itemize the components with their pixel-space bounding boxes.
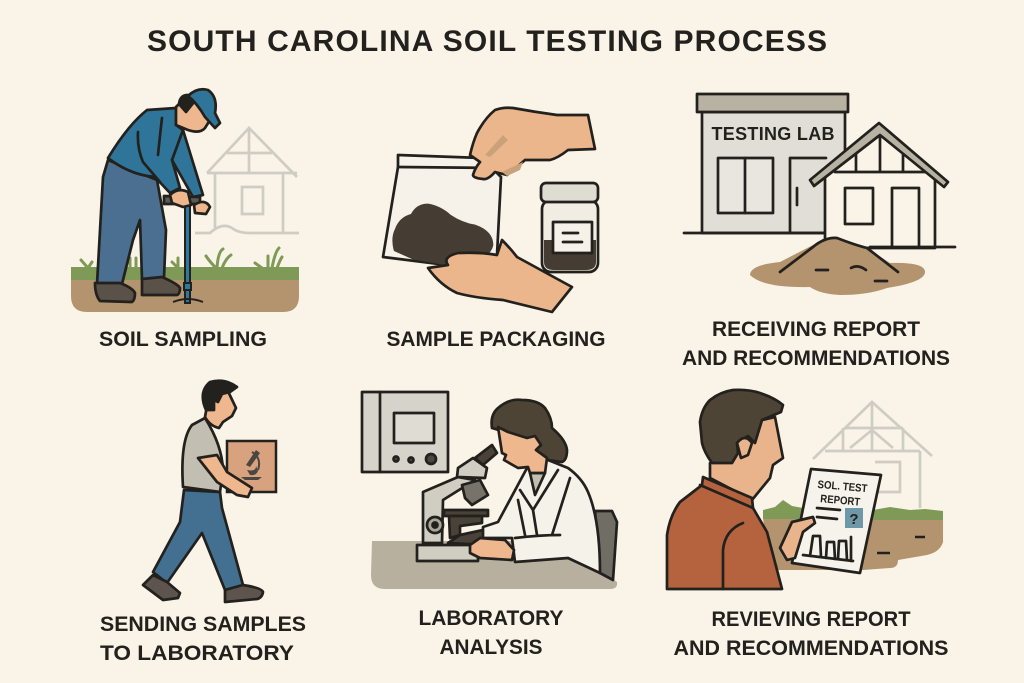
icon: man: [667, 390, 783, 589]
soil ground: [71, 280, 299, 312]
green bushes: [763, 500, 943, 520]
bench: [371, 541, 617, 589]
icon: soil mound: [750, 238, 925, 295]
panel: sending samples: [100, 381, 306, 665]
icon: hand: [780, 517, 815, 560]
icon: walking person: [143, 381, 263, 602]
label: sending samples: SENDING SAMPLES: [100, 613, 306, 636]
label: laboratory analysis: [418, 607, 564, 659]
label: sample packaging: SAMPLE PACKAGING: [386, 328, 606, 351]
icon: lower hand: [428, 240, 572, 312]
icon: chair: [595, 511, 617, 580]
panel: reviewing report: [667, 390, 948, 660]
icon: microscope: [417, 445, 497, 561]
panel: soil sampling: [71, 89, 299, 351]
label: question mark: ?: [849, 511, 859, 528]
label: sending samples: TO LABORATORY: [100, 642, 294, 665]
icon: soil jar: [541, 183, 598, 272]
icon: upper hand: [470, 108, 595, 179]
label: report heading: SOL. TEST: [817, 479, 868, 495]
icon: faded house: [813, 402, 932, 508]
panel: receiving report: [682, 94, 955, 370]
label: receiving report: [682, 318, 950, 370]
label: revieving report: AND RECOMMENDATIONS: [674, 637, 948, 660]
icon: testing lab building: [684, 94, 848, 233]
icon: house: [810, 123, 955, 248]
icon: report sheet: [792, 469, 881, 573]
label: report heading: [816, 479, 868, 509]
label: revieving report: [674, 608, 948, 660]
label: receiving report: RECEIVING REPORT: [712, 318, 920, 341]
icon: plastic bag with soil: [383, 155, 501, 265]
icon: soil probe: [173, 206, 203, 303]
label: report heading: REPORT: [820, 493, 861, 509]
icon: farmer: [95, 89, 220, 302]
icon: scientist: [470, 400, 600, 573]
grass tufts: [81, 248, 282, 268]
label: laboratory analysis: ANALYSIS: [440, 636, 542, 659]
title: SOUTH CAROLINA SOIL TESTING PROCESS: [147, 25, 827, 58]
panel: sample packaging: [383, 108, 606, 351]
label: laboratory analysis: LABORATORY: [418, 607, 564, 630]
soil dashes: [877, 537, 925, 553]
label: testing lab sign: TESTING LAB: [712, 124, 834, 144]
label: soil sampling: SOIL SAMPLING: [99, 328, 267, 351]
panel: laboratory analysis: [362, 392, 617, 659]
soil ground: [763, 518, 943, 570]
label: receiving report: AND RECOMMENDATIONS: [682, 347, 950, 370]
icon: box with microscope: [227, 441, 276, 492]
label: revieving report: REVIEVING REPORT: [712, 608, 911, 631]
label: sending samples: [100, 613, 306, 665]
icon: wall instrument: [362, 392, 448, 472]
icon: faded house: [195, 128, 299, 233]
